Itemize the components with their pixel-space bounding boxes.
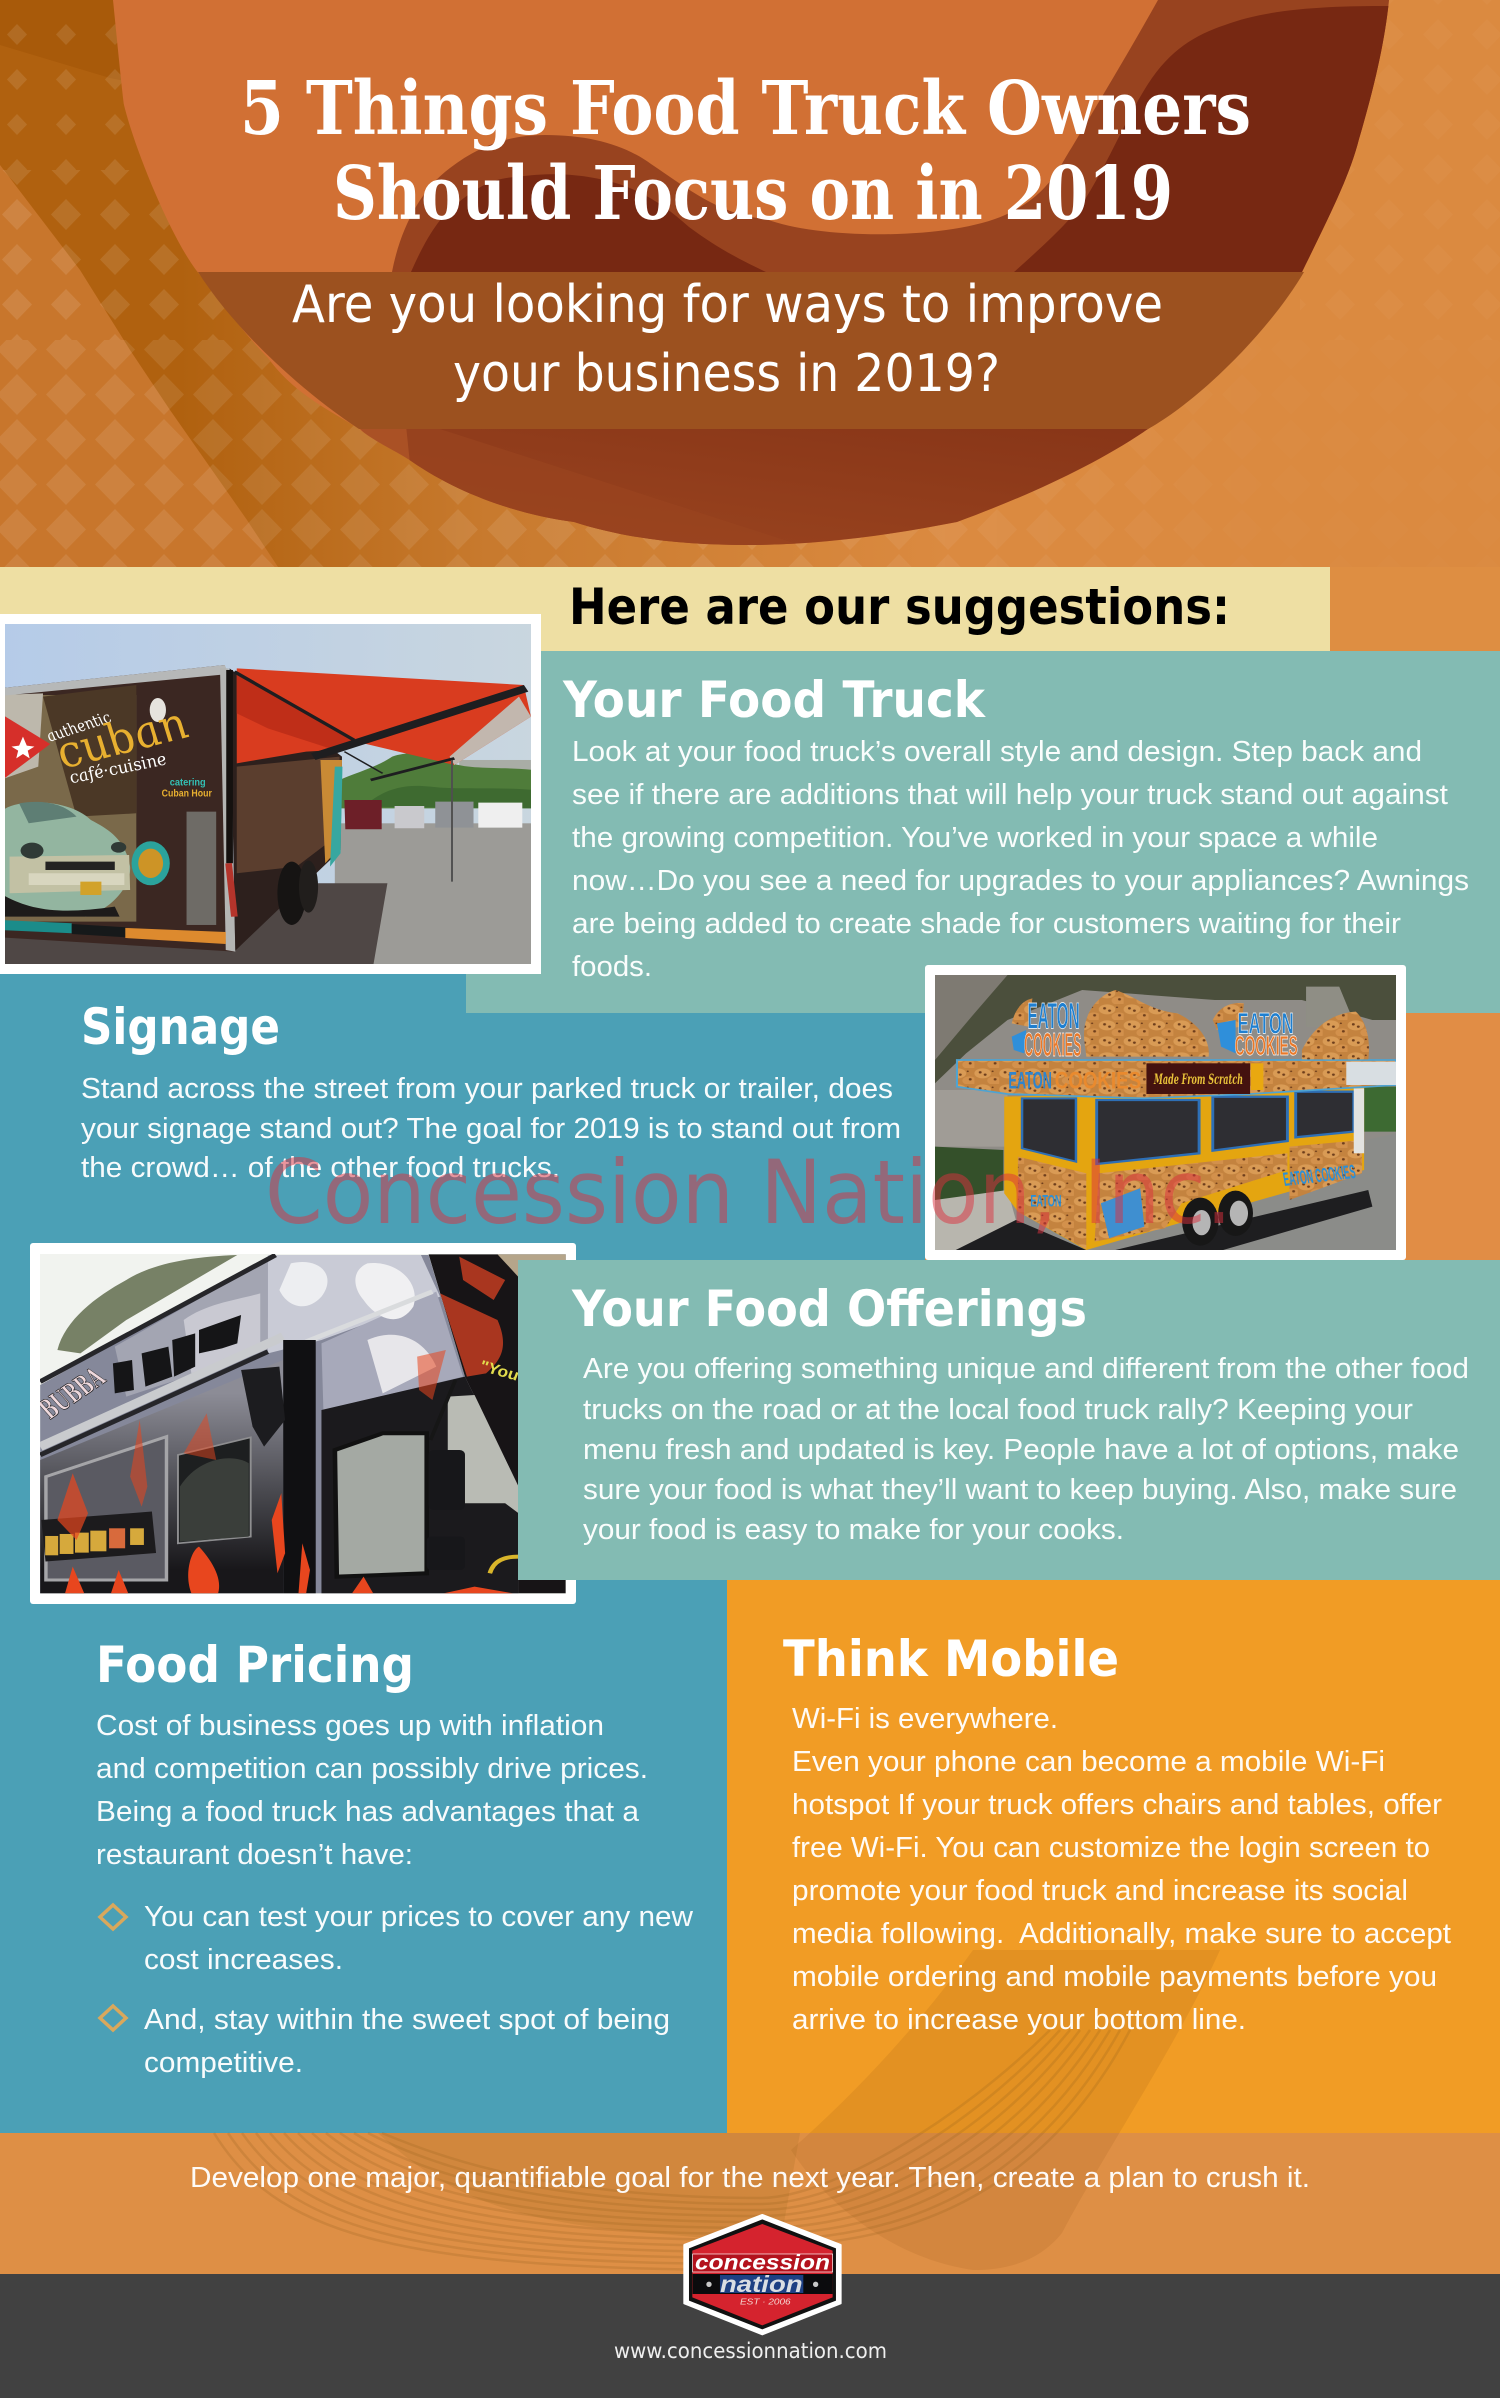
- heading: think mobile: Think Mobile: [783, 1630, 1119, 1688]
- subtitle: [292, 275, 1163, 404]
- suggestions heading bar: [0, 567, 1330, 651]
- text: food offerings body: [583, 1353, 1469, 1546]
- photo: cuban cafe trailer: authentic: [42, 709, 116, 745]
- photo: eaton cookies trailer: Made From Scratch: [1153, 1071, 1243, 1088]
- photo: cuban cafe trailer: café·cuisine: [66, 749, 170, 787]
- photo: eaton cookies trailer: EATON: [1238, 1007, 1294, 1040]
- photo: eaton cookies trailer: COOKIES: [1024, 1026, 1081, 1063]
- photo: flame wrapped truck: "You: [477, 1358, 521, 1384]
- logo: concession nation: [684, 2215, 841, 2334]
- text: think mobile body: Wi-Fi is everywhere.: [792, 1703, 1058, 1735]
- photo: flame wrapped truck: BUBBA: [32, 1361, 112, 1425]
- bullet text 1: You can test your prices to cover any new: [144, 1901, 694, 1933]
- heading: your food truck: Your Food Truck: [562, 671, 987, 729]
- icon: diamond bullet 1: [100, 1905, 126, 1929]
- text: signage body: [81, 1073, 901, 1184]
- text: food offerings body: menu fresh and updated is key. People have a lot of options, make: [583, 1434, 1459, 1466]
- text: food pricing body: Cost of business goes up with inflation: [96, 1710, 604, 1742]
- footer bar: [0, 2274, 1500, 2398]
- heading: food pricing: Food Pricing: [96, 1636, 414, 1694]
- logo: concession nation: concession: [695, 2250, 830, 2274]
- photo: cuban cafe trailer: catering: [170, 776, 206, 788]
- heading: signage: Signage: [81, 998, 280, 1056]
- photo: flame wrapped truck: [30, 1243, 576, 1604]
- text: signage body: the crowd… of the other food trucks.: [81, 1152, 560, 1184]
- text: signage body: your signage stand out? The goal for 2019 is to stand out from: [81, 1113, 901, 1145]
- panel: your food truck: [466, 651, 1500, 1013]
- text: think mobile body: Even your phone can become a mobile Wi-Fi: [792, 1746, 1385, 1778]
- title: Should Focus on in 2019: [333, 151, 1173, 237]
- text: your food truck: are being added to create shade for customers waiting for their: [572, 908, 1401, 940]
- subtitle: Are you looking for ways to improve: [292, 275, 1163, 335]
- bullet text 1: cost increases.: [144, 1944, 343, 1976]
- text: your food truck: the growing competition. You’ve worked in your space a while: [572, 822, 1378, 854]
- text: food offerings body: your food is easy to make for your cooks.: [583, 1514, 1124, 1546]
- text: think mobile body: free Wi-Fi. You can customize the login screen to: [792, 1832, 1430, 1864]
- text: food offerings body: Are you offering something unique and different from the other food: [583, 1353, 1469, 1385]
- photo: eaton cookies trailer: COOKIES: [1235, 1030, 1298, 1061]
- panel: closing strip: [0, 2133, 1500, 2274]
- subtitle banner: [198, 272, 1304, 429]
- photo: eaton cookies trailer: EATON: [1008, 1066, 1052, 1094]
- text: your food truck: see if there are additions that will help your truck stand out against: [572, 779, 1448, 811]
- panel: orange side block: [1405, 1013, 1500, 1260]
- title: [240, 66, 1251, 237]
- text: signage body: Stand across the street from your parked truck or trailer, does: [81, 1073, 893, 1105]
- text: website url: www.concessionnation.com: [614, 2339, 887, 2363]
- header background: [0, 0, 1048, 567]
- bullet text 1: [144, 1901, 694, 1976]
- photo: eaton cookies trailer: COOKIES: [1055, 1066, 1141, 1094]
- bullet text 2: And, stay within the sweet spot of being: [144, 2004, 670, 2036]
- photo: cuban cafe trailer: [0, 614, 541, 974]
- text: think mobile body: promote your food truck and increase its social: [792, 1875, 1408, 1907]
- photo: eaton cookies trailer: [925, 965, 1406, 1260]
- text: closing goal: Develop one major, quantifiable goal for the next year. Then, create a plan to crush it.: [190, 2162, 1310, 2194]
- bullet text 2: competitive.: [144, 2047, 303, 2079]
- photo: eaton cookies trailer: EATON COOKIES: [1281, 1160, 1357, 1190]
- suggestions heading bar: Here are our suggestions:: [569, 578, 1230, 636]
- panel: food pricing: [96, 1636, 694, 2079]
- text: think mobile body: [792, 1703, 1451, 2036]
- text: food pricing body: [96, 1710, 648, 1871]
- bullet text 2: [144, 2004, 670, 2079]
- text: your food truck: [572, 736, 1469, 983]
- text: food pricing body: and competition can possibly drive prices.: [96, 1753, 648, 1785]
- text: think mobile body: media following. Additionally, make sure to accept: [792, 1918, 1451, 1950]
- text: think mobile body: hotspot If your truck offers chairs and tables, offer: [792, 1789, 1442, 1821]
- subtitle: your business in 2019?: [453, 344, 1000, 404]
- text: food offerings body: trucks on the road or at the local food truck rally? Keeping your: [583, 1394, 1413, 1426]
- header bowl shape: [113, 0, 1389, 545]
- logo: concession nation: nation: [720, 2271, 803, 2297]
- text: your food truck: foods.: [572, 951, 652, 983]
- photo: eaton cookies trailer: EATON: [1027, 996, 1080, 1036]
- photo: cuban cafe trailer: cuban: [45, 698, 198, 778]
- right edge orange block: [1330, 567, 1500, 651]
- photo: eaton cookies trailer: EATON: [1030, 1192, 1061, 1210]
- text: think mobile body: mobile ordering and mobile payments before you: [792, 1961, 1437, 1993]
- text: think mobile body: arrive to increase your bottom line.: [792, 2004, 1246, 2036]
- panel: think mobile: [214, 1580, 1500, 2270]
- heading: your food offerings: Your Food Offerings: [571, 1280, 1087, 1338]
- title: 5 Things Food Truck Owners: [240, 66, 1251, 152]
- text: your food truck: now…Do you see a need for upgrades to your appliances? Awnings: [572, 865, 1469, 897]
- panel: your food offerings: [518, 1260, 1500, 1580]
- text: food offerings body: sure your food is what they’ll want to keep buying. Also, make sure: [583, 1474, 1457, 1506]
- panel: blue background: [0, 974, 925, 2133]
- text: your food truck: Look at your food truck’s overall style and design. Step back and: [572, 736, 1422, 768]
- icon: diamond bullet 2: [100, 2006, 126, 2030]
- watermark: Concession Nation, Inc.: [265, 1141, 1232, 1244]
- photo: cuban cafe trailer: Cuban Hour: [162, 788, 212, 799]
- logo: concession nation: EST · 2006: [740, 2296, 791, 2306]
- text: food pricing body: restaurant doesn’t have:: [96, 1839, 413, 1871]
- text: food pricing body: Being a food truck has advantages that a: [96, 1796, 640, 1828]
- text: signage block: [81, 998, 901, 1184]
